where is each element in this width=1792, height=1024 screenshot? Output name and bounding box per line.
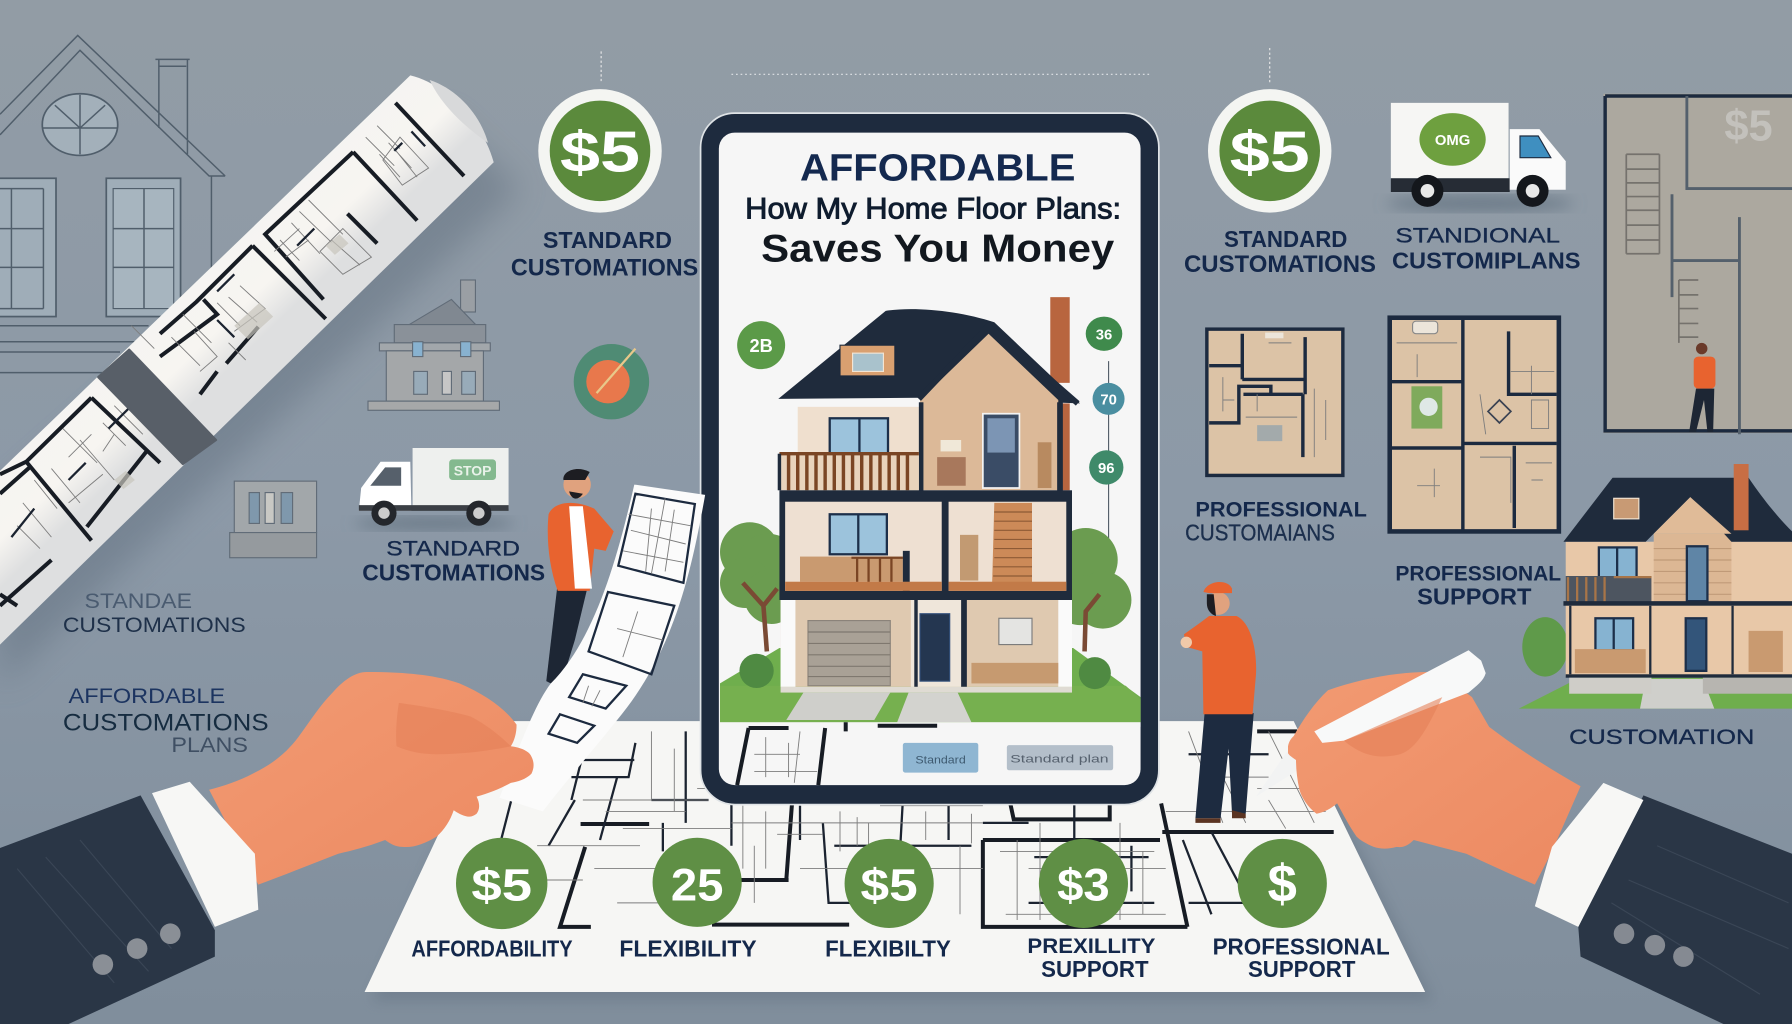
floor plan A [1207, 329, 1343, 475]
floor plan B [1390, 318, 1559, 531]
tablet plan strip [737, 722, 1113, 785]
right house bush [1522, 617, 1568, 677]
sketch house top left [0, 35, 225, 373]
label: faded standard customations [63, 588, 246, 637]
label: affordable customations plans: PLANS [171, 732, 248, 757]
middle floor [779, 490, 1072, 600]
right hand holding pen [1256, 650, 1792, 1024]
label: professional support: SUPPORT [1417, 584, 1531, 610]
sheet badge: flexibility two: $5 [861, 860, 918, 911]
sheet badge: flexibility one: 25 [671, 860, 723, 911]
right house lawn [1519, 678, 1792, 709]
tablet [701, 113, 1159, 805]
house cutaway illustration [720, 297, 1141, 727]
top price badge right [1208, 48, 1331, 213]
label: standard customations right [1184, 226, 1376, 278]
small building sketch [230, 481, 317, 558]
worker in orange [1181, 582, 1256, 823]
label: professional support: PROFESSIONAL [1395, 561, 1561, 586]
right sleeve buttons [1614, 923, 1694, 967]
top price badge left: $5 [560, 120, 640, 184]
left hand [209, 672, 534, 885]
tablet plan strip: Standard plan [1010, 753, 1109, 765]
value badges in tablet [737, 317, 1125, 571]
label: standard customations left: STANDARD [543, 227, 672, 253]
large grey floor plan: $5 [1724, 103, 1773, 151]
lawn [720, 648, 1141, 722]
small delivery truck [354, 448, 514, 530]
tablet screen [719, 133, 1141, 785]
sheet badge: prexillity support: $3 [1057, 860, 1110, 911]
label: standional customiplans: CUSTOMIPLANS [1392, 248, 1581, 274]
top price badge right: $5 [1230, 120, 1310, 184]
sheet plan lines [494, 731, 1334, 927]
label: standard customations left [511, 227, 698, 281]
label: faded standard customations: CUSTOMATIONS [63, 612, 246, 637]
sheet badge: affordability: $5 [471, 860, 532, 911]
label: affordable customations plans: AFFORDABLE [69, 683, 225, 708]
left cuff [152, 782, 258, 927]
trees [720, 522, 1131, 689]
chimney [1050, 297, 1070, 383]
roll plan drawings [0, 103, 464, 606]
label: customation: CUSTOMATION [1569, 724, 1754, 749]
label: professional customaians [1185, 497, 1367, 546]
sheet badge: prexillity support: SUPPORT [1041, 956, 1149, 982]
value badges in tablet: 96 [1098, 461, 1115, 477]
tablet title: AFFORDABLE [800, 147, 1075, 189]
right house roof [1563, 478, 1792, 542]
right house balcony and beams [1566, 576, 1651, 602]
sheet badge: flexibility one: FLEXIBILITY [619, 936, 757, 962]
sheet badge: flexibility one [619, 838, 757, 962]
right cuff [1535, 783, 1643, 927]
left hand and sleeve [0, 672, 534, 1024]
orange icon badge [574, 344, 649, 419]
left sleeve [0, 795, 215, 1024]
label: faded standard customations: STANDAE [85, 588, 192, 613]
right hand [1288, 672, 1581, 885]
value badges in tablet: 70 [1100, 393, 1117, 409]
value badges in tablet: 36 [1096, 327, 1112, 343]
label: standard customations left: CUSTOMATIONS [511, 254, 698, 281]
right house windows [1599, 547, 1637, 584]
suburban house right [1519, 464, 1792, 709]
pen [1314, 650, 1486, 743]
label: professional support [1395, 561, 1561, 610]
top price badge left [538, 51, 662, 213]
large delivery truck [1386, 103, 1574, 211]
roll band [98, 350, 216, 464]
small delivery truck: STOP [454, 463, 491, 478]
value badges in tablet: 2B [749, 335, 773, 356]
sheet badge: professional support: $ [1268, 855, 1297, 914]
tablet plan strip: Standard [915, 754, 966, 766]
roof [778, 309, 1080, 403]
label: affordable customations plans [63, 683, 269, 757]
paper plan sheet [499, 485, 705, 811]
right sleeve [1578, 795, 1792, 1024]
pen tip [1256, 749, 1309, 797]
label: standional customiplans [1392, 222, 1581, 274]
label: affordable customations plans: CUSTOMATIONS [63, 709, 269, 736]
tablet frame [701, 113, 1159, 805]
small worker [1689, 343, 1715, 432]
left sleeve buttons [93, 923, 181, 975]
tablet title [745, 147, 1121, 271]
left hand shading [396, 703, 511, 754]
label: standard customations truck [362, 535, 545, 586]
tablet title: How My Home Floor Plans: [745, 192, 1121, 225]
balcony [779, 454, 919, 490]
upper floor [798, 407, 921, 490]
small sketch house [368, 280, 499, 410]
right house body [1566, 542, 1792, 677]
sheet badge: flexibility two: FLEXIBILTY [825, 936, 951, 962]
tablet title: Saves You Money [761, 228, 1115, 271]
ground floor [781, 600, 1072, 687]
man with paper plan [499, 469, 705, 811]
label: standard customations truck: STANDARD [386, 535, 520, 560]
sheet badge: prexillity support [1027, 839, 1156, 982]
large grey floor plan [1603, 94, 1792, 434]
floor plan sheet [365, 721, 1433, 1001]
label: standard customations truck: CUSTOMATIONS [362, 560, 545, 586]
sheet badge: professional support: SUPPORT [1248, 956, 1355, 982]
label: standard customations right: CUSTOMATIONS [1184, 251, 1376, 278]
sheet badge: affordability: AFFORDABILITY [411, 936, 573, 962]
sheet badge: prexillity support: PREXILLITY [1027, 933, 1156, 958]
sheet badge: affordability [411, 838, 573, 962]
label: standional customiplans: STANDIONAL [1395, 222, 1560, 247]
man figure [546, 469, 614, 688]
large delivery truck: OMG [1435, 133, 1470, 149]
rolled floor plan [0, 75, 520, 686]
label: professional customaians: PROFESSIONAL [1195, 497, 1367, 522]
sheet badge: professional support: PROFESSIONAL [1213, 933, 1390, 959]
right house foundation [1569, 678, 1651, 694]
dormer [840, 345, 895, 376]
label: professional customaians: CUSTOMAIANS [1185, 520, 1335, 546]
roll paper [0, 75, 494, 645]
roll curled end [430, 80, 488, 143]
label: standard customations right: STANDARD [1224, 226, 1347, 252]
sheet badge: flexibility two [825, 839, 951, 962]
sheet badge: professional support [1213, 839, 1390, 982]
roll shadow [0, 114, 520, 686]
right hand shading [1344, 697, 1442, 756]
